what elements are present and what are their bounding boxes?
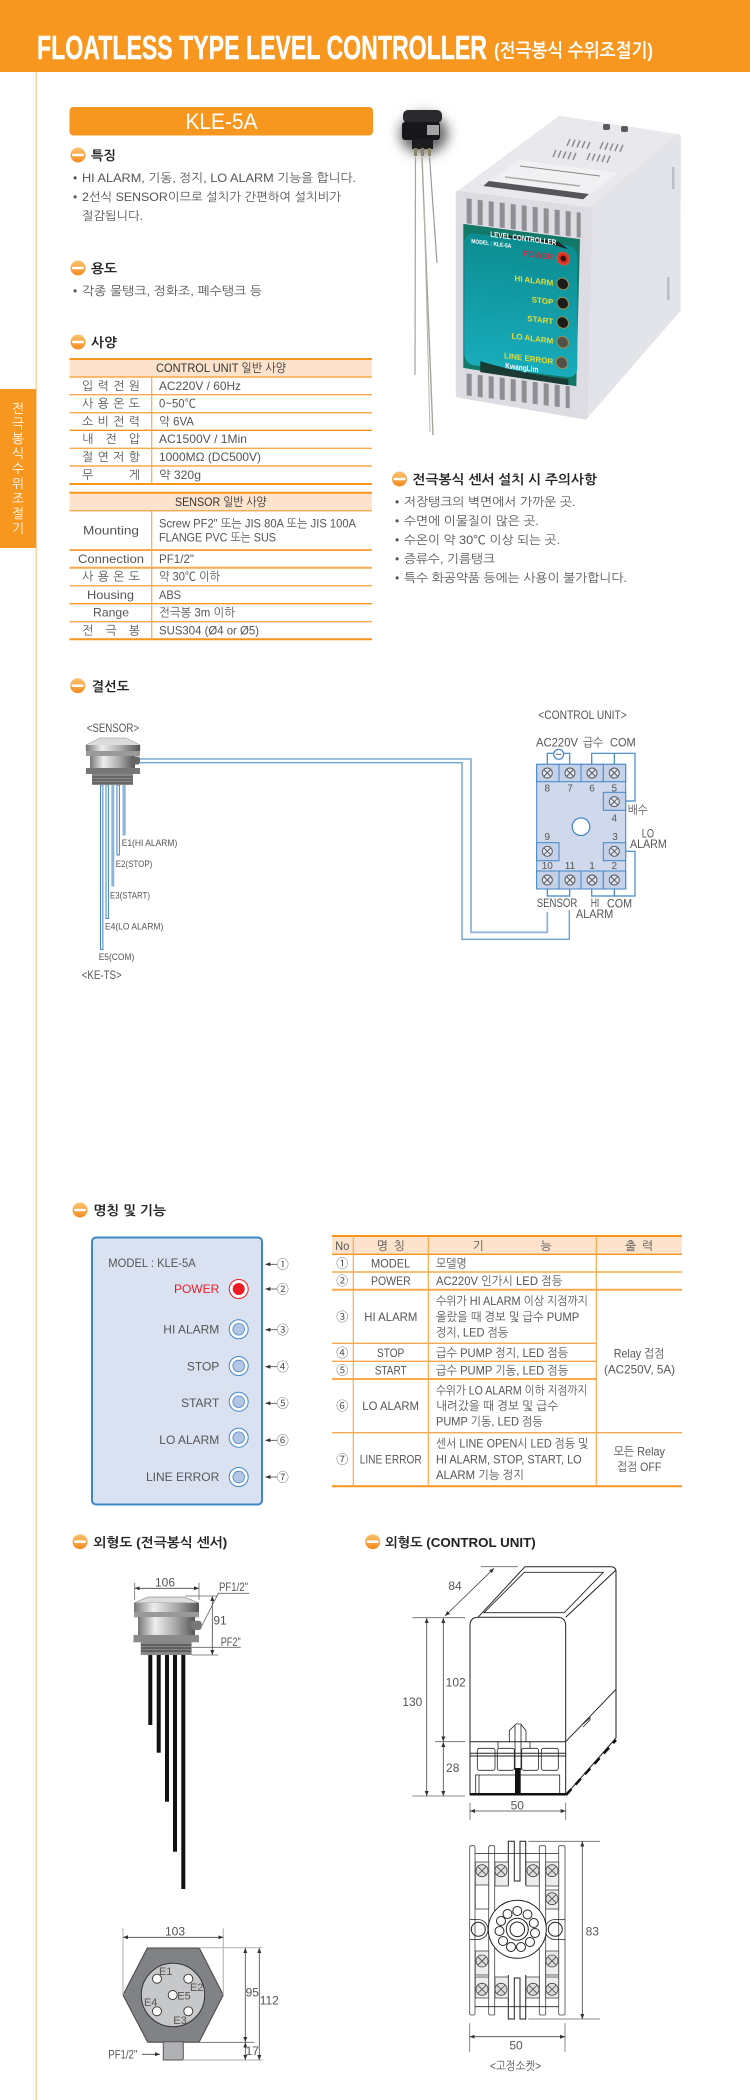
table: control unit specs: 소 비 전 력 [82, 414, 140, 428]
panel: front panel diagram: MODEL : KLE-5A [108, 1256, 196, 1270]
callout arrows with numbers: ④ [277, 1360, 289, 1374]
terminal block: 8 [545, 784, 551, 794]
dimension drawing: control unit: 130 [402, 1695, 423, 1709]
section: sensor installation cautions: • [395, 495, 399, 509]
front panel: START [527, 314, 553, 326]
callout arrows with numbers: ⑥ [277, 1434, 289, 1448]
table: names and functions: 수위가 LO ALARM 이하 지점까지 [436, 1384, 587, 1398]
dimension drawing: sensor top view: E4 [144, 1997, 157, 2009]
table: control unit specs: 절 연 저 항 [82, 450, 141, 464]
section heading: control unit outline: 외형도 (CONTROL UNIT) [385, 1535, 536, 1550]
cables between sensor and control unit [140, 759, 569, 939]
side tab: 수 [12, 461, 24, 476]
icon: heading bullet [72, 1534, 88, 1549]
table: control unit specs: AC220V / 60Hz [159, 379, 241, 393]
table: control unit specs: 약 320g [159, 468, 201, 482]
panel: front panel diagram [92, 1238, 262, 1504]
section heading: wiring diagram: 결선도 [92, 679, 129, 694]
section heading: sensor outline: 외형도 (전극봉식 센서) [93, 1535, 227, 1550]
section: features: 절감됩니다. [82, 209, 143, 223]
table: sensor specs: ABS [159, 588, 181, 602]
table: control unit specs: 내 전 압 [82, 432, 140, 446]
wiring diagram: control unit [536, 708, 667, 921]
wiring diagram: sensor: E1(HI ALARM) [122, 838, 177, 848]
front panel: KwangLim [505, 361, 538, 374]
icon: heading bullet [70, 334, 86, 350]
indicator: stop: STOP [187, 1360, 219, 1374]
terminal block: 9 [545, 832, 551, 843]
indicator: start [181, 1392, 248, 1411]
table: control unit specs [70, 359, 372, 484]
section: features: HI ALARM, 기동, 정지, LO ALARM 기능을 합니다. [82, 171, 356, 185]
table: names and functions: 내려갔을 때 경보 및 급수 [436, 1399, 558, 1413]
table: names and functions: 접점 OFF [617, 1460, 661, 1474]
section: usage: • [73, 284, 77, 298]
table: names and functions: ⑥ [336, 1399, 348, 1413]
table: control unit specs: 사 용 온 도 [82, 396, 140, 410]
table: names and functions: 센서 LINE OPEN시 LED 점등 및 [436, 1436, 588, 1450]
section: usage [70, 260, 262, 298]
section: features [70, 148, 356, 223]
indicator: lo alarm [159, 1428, 248, 1447]
wiring diagram: sensor: E5(COM) [99, 952, 134, 962]
indicator: line error [146, 1468, 248, 1486]
section: sensor installation cautions [392, 472, 627, 585]
section: sensor installation cautions: 수면에 이물질이 많은 곳. [404, 514, 539, 528]
indicator: hi alarm [163, 1320, 248, 1339]
wiring diagram: control unit: ALARM [576, 907, 613, 921]
terminal block: 2 [612, 861, 618, 872]
table: sensor specs: 약 30℃ 이하 [159, 570, 221, 584]
product photo: electrode sensor [400, 110, 448, 435]
dimension drawing: fixing socket: 83 [586, 1924, 599, 1938]
dimension drawing: sensor top view: PF1/2" [108, 2048, 137, 2062]
rods [148, 1655, 185, 1889]
icon: heading bullet [365, 1534, 380, 1549]
wiring diagram: control unit: SENSOR [537, 896, 578, 910]
table: control unit specs: AC1500V / 1Min [159, 432, 247, 446]
table: names and functions: 급수 PUMP 정지, LED 점등 [436, 1346, 568, 1360]
sensor head [134, 1597, 202, 1655]
table: names and functions: 명 칭 [377, 1239, 405, 1253]
table: names and functions: ⑦ [336, 1452, 348, 1466]
left margin rule [36, 72, 37, 2100]
section: sensor installation cautions: 저장탱크의 벽면에서 가까운 곳. [404, 495, 576, 509]
dimension drawing: sensor side view: 106 [155, 1576, 175, 1590]
table: control unit specs: 약 6VA [159, 414, 194, 428]
table: names and functions: HI ALARM [364, 1310, 417, 1324]
dimension drawing: control unit: 28 [446, 1761, 460, 1775]
section: sensor installation cautions: 전극봉식 센서 설치 시 주의사항 [412, 472, 598, 487]
front panel: HI ALARM [515, 274, 554, 288]
callout arrows with numbers [265, 1258, 289, 1484]
sensor head [86, 738, 140, 785]
terminal block: 5 [612, 784, 618, 794]
side tab: 식 [12, 446, 24, 461]
callout arrows with numbers: ① [277, 1258, 289, 1272]
icon: heading bullet [70, 678, 85, 693]
dimension drawing: sensor top view: 103 [165, 1924, 185, 1938]
front panel: POWER [523, 249, 553, 262]
callout arrows with numbers: ② [277, 1282, 289, 1296]
table: sensor specs: Housing [87, 588, 134, 602]
dimension drawing: sensor side view: PF1/2" [219, 1580, 248, 1594]
dimension drawing: sensor top view: E2 [190, 1982, 203, 1994]
section: features: • [73, 171, 77, 185]
callout arrows with numbers: ⑦ [277, 1470, 289, 1484]
table: names and functions: LINE ERROR [360, 1452, 422, 1466]
table: sensor specs: SUS304 (Ø4 or Ø5) [159, 624, 259, 638]
table: sensor specs: Mounting [83, 524, 139, 538]
table: names and functions: ① [336, 1256, 348, 1270]
front panel: LINE ERROR [504, 351, 554, 366]
section: features: • [73, 190, 77, 204]
wiring diagram: control unit: 배수 [628, 803, 648, 817]
section: sensor installation cautions: 특수 화공약품 등에는 사용이 불가합니다. [404, 571, 627, 585]
dimension drawing: fixing socket: <고정소켓> [490, 2059, 541, 2073]
dimension drawing: sensor side view: PF2" [221, 1635, 241, 1649]
dimension drawing: sensor top view: E5 [177, 1990, 191, 2002]
dimension drawing: control unit: 50 [511, 1798, 524, 1812]
table: control unit specs: 1000MΩ (DC500V) [159, 450, 261, 464]
wiring diagram: control unit: LO [642, 826, 654, 840]
section: usage: 용도 [91, 261, 117, 276]
terminal block: 4 [612, 814, 618, 824]
section: specifications heading: 사양 [91, 335, 118, 350]
terminal block: 1 [589, 861, 595, 872]
indicator: hi alarm: HI ALARM [163, 1322, 219, 1336]
table: names and functions: MODEL [371, 1256, 411, 1270]
section: sensor installation cautions: • [395, 552, 399, 566]
title: FLOATLESS TYPE LEVEL CONTROLLER [37, 29, 487, 66]
sensor electrode rods [100, 785, 126, 950]
section: usage: 각종 물탱크, 정화조, 폐수탱크 등 [82, 284, 262, 298]
table: names and functions: AC220V 인가시 LED 점등 [436, 1274, 562, 1288]
table: names and functions: 능 [540, 1239, 552, 1253]
model bar: KLE-5A [186, 109, 258, 134]
table: sensor specs: Range [93, 606, 129, 620]
section: sensor installation cautions: • [395, 514, 399, 528]
wiring diagram: sensor: E4(LO ALARM) [105, 922, 163, 932]
terminal block: 10 [542, 861, 553, 872]
dimension drawing: sensor top view: E1 [159, 1966, 172, 1978]
dimension drawing: sensor top view: 17 [246, 2044, 259, 2058]
front panel: LO ALARM [511, 332, 554, 346]
table: names and functions: 올랐을 때 경보 및 급수 PUMP [436, 1310, 579, 1324]
side tab: 전 [12, 401, 24, 416]
wiring diagram: sensor: <SENSOR> [87, 721, 139, 735]
side tab: 절 [12, 506, 24, 521]
dimension drawing: sensor top view: 112 [260, 1994, 279, 2008]
terminal block: 6 [589, 784, 595, 794]
wiring diagram: control unit: <CONTROL UNIT> [538, 708, 627, 722]
section: specifications heading [70, 334, 118, 350]
table: names and functions: PUMP 기동, LED 점등 [436, 1414, 543, 1428]
indicator: lo alarm: LO ALARM [159, 1433, 219, 1447]
section heading: names and functions: 명칭 및 기능 [93, 1203, 166, 1218]
side tab: 봉 [12, 431, 24, 446]
indicator: line error: LINE ERROR [146, 1470, 220, 1484]
table: names and functions: STOP [377, 1346, 404, 1360]
table: sensor specs: Connection [78, 552, 144, 566]
dimension drawing: control unit: 84 [448, 1579, 462, 1593]
table: control unit specs: 무 게 [82, 468, 140, 482]
wiring diagram: sensor: E2(STOP) [116, 859, 152, 869]
table: names and functions: 급수 PUMP 기동, LED 점등 [436, 1364, 568, 1378]
indicator: power [174, 1280, 248, 1298]
table: sensor specs: 전극봉 3m 이하 [159, 606, 236, 620]
dimension drawing: sensor top view [108, 1924, 279, 2062]
wiring diagram: sensor [82, 721, 177, 982]
table: names and functions: 수위가 HI ALARM 이상 지점까지 [436, 1294, 588, 1308]
table: names and functions: 모델명 [436, 1256, 467, 1270]
front panel [463, 198, 581, 410]
callout arrows with numbers: ⑤ [277, 1396, 289, 1410]
table: names and functions: 출 력 [625, 1239, 653, 1253]
product photo: controller unit [458, 118, 678, 417]
section: features: 2선식 SENSOR이므로 설치가 간편하여 설치비가 [82, 190, 341, 204]
table: sensor specs [70, 493, 372, 639]
dimension drawing: control unit [402, 1567, 616, 1820]
icon: heading bullet [70, 260, 86, 276]
dimension drawing: control unit: 102 [446, 1676, 466, 1690]
terminal block: 7 [567, 784, 573, 794]
table: names and functions: LO ALARM [362, 1399, 419, 1413]
table: names and functions: ④ [336, 1346, 348, 1360]
dimension drawing: sensor side view: 91 [213, 1614, 227, 1628]
section: sensor installation cautions: 증류수, 기름탱크 [404, 552, 495, 566]
table: names and functions: 기 [473, 1239, 484, 1253]
terminal wiring [547, 749, 635, 896]
table: names and functions: ② [336, 1274, 348, 1288]
table: names and functions: ⑤ [336, 1364, 348, 1378]
table: sensor specs: SENSOR 일반 사양 [175, 495, 266, 509]
table: names and functions: Relay 접점 [614, 1346, 664, 1360]
side tab: 조 [12, 491, 24, 506]
table: names and functions: ③ [336, 1310, 348, 1324]
icon: heading bullet [392, 472, 407, 486]
wiring diagram: control unit: 급수 [583, 736, 603, 750]
icon: heading bullet [72, 1202, 88, 1218]
dimension drawing: sensor top view: 95 [246, 1986, 259, 2000]
table: names and functions: (AC250V, 5A) [604, 1362, 675, 1376]
table: sensor specs: FLANGE PVC 또는 SUS [159, 530, 276, 544]
table: names and functions: ALARM 기능 정지 [436, 1468, 524, 1482]
table: sensor specs: 전 극 봉 [82, 624, 140, 638]
table: names and functions: POWER [371, 1274, 411, 1288]
section heading: wiring diagram [70, 678, 129, 694]
wiring diagram: control unit: COM [607, 896, 632, 910]
callout arrows with numbers: ③ [277, 1323, 289, 1337]
title subtitle: (전극봉식 수위조절기) [494, 41, 653, 62]
section: sensor installation cautions: • [395, 533, 399, 547]
dimension drawing: fixing socket: 50 [509, 2038, 523, 2052]
indicator: power: POWER [174, 1282, 220, 1296]
front panel: MODEL : KLE-5A [471, 239, 512, 250]
section: sensor installation cautions: 수온이 약 30℃ 이상 되는 곳. [404, 533, 560, 547]
wiring diagram: control unit: ALARM [630, 837, 667, 851]
table: names and functions: HI ALARM, STOP, START, LO [436, 1452, 582, 1466]
wiring diagram: sensor: <KE-TS> [82, 968, 122, 982]
dimension drawing: fixing socket [470, 1841, 600, 2073]
wiring diagram: sensor: E3(START) [110, 890, 150, 900]
table: names and functions [332, 1236, 682, 1486]
side tab [0, 389, 36, 548]
icon: heading bullet [70, 148, 86, 162]
side tab: 위 [12, 476, 24, 491]
indicator: start: START [181, 1396, 220, 1410]
table: names and functions: 모든 Relay [614, 1444, 665, 1458]
wiring diagram: control unit: HI [591, 896, 599, 910]
table: sensor specs: Screw PF2" 또는 JIS 80A 또는 JIS 100A [159, 516, 356, 530]
front panel: STOP [532, 295, 554, 307]
section: sensor installation cautions: • [395, 571, 399, 585]
wiring diagram: control unit: AC220V [536, 736, 578, 750]
side tab: 극 [12, 416, 24, 431]
table: control unit specs: CONTROL UNIT 일반 사양 [156, 361, 286, 375]
table: names and functions: 정지, LED 점등 [436, 1326, 508, 1340]
table: names and functions: No [335, 1239, 350, 1253]
dimension drawing: sensor side view [134, 1576, 249, 1889]
terminal block: 3 [612, 832, 618, 843]
dimension drawing: sensor top view: E3 [173, 2015, 187, 2027]
front panel: LEVEL CONTROLLER [490, 230, 556, 247]
table: sensor specs: PF1/2" [159, 552, 194, 566]
indicator: stop [187, 1356, 248, 1376]
header banner [0, 0, 750, 72]
table: sensor specs: 사 용 온 도 [82, 570, 140, 584]
wiring diagram: control unit: COM [610, 736, 636, 750]
table: control unit specs: 0~50℃ [159, 396, 196, 410]
section: features: 특징 [91, 148, 116, 163]
model bar [70, 107, 373, 136]
table: control unit specs: 입 력 전 원 [82, 379, 140, 393]
terminal block: 11 [565, 861, 576, 872]
table: names and functions: START [375, 1364, 407, 1378]
side tab: 기 [12, 521, 24, 536]
terminal block [537, 764, 626, 889]
